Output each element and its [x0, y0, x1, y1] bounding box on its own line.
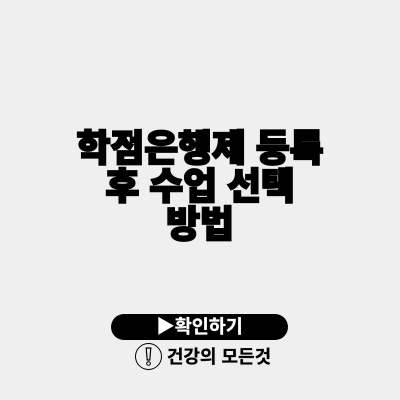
title: [76, 128, 324, 245]
title: 후 수업 선택: [105, 166, 295, 207]
title: 방법: [166, 204, 234, 245]
button: confirm: [111, 314, 288, 340]
brand text: 건강의 모든것: [167, 347, 271, 367]
title: 학점은행제 등록: [77, 128, 323, 169]
icon: exclamation in circle: [135, 343, 162, 370]
button: confirm: ▶확인하기: [156, 316, 243, 337]
